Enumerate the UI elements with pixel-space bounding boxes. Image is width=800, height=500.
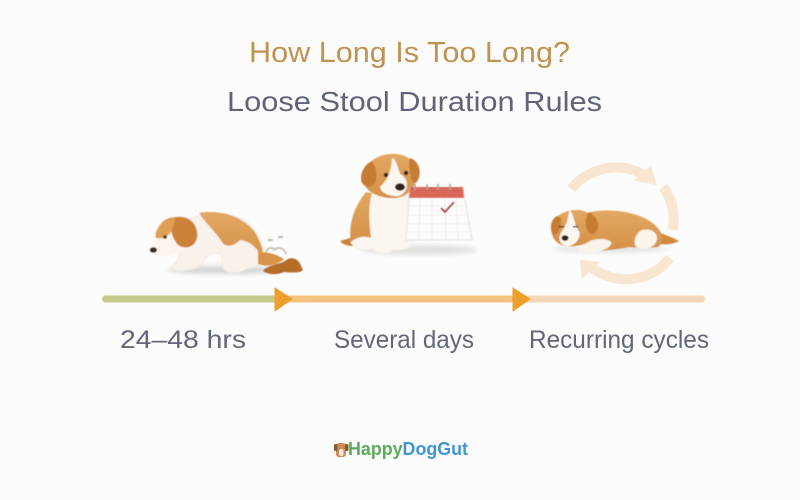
- stool pile: [263, 258, 303, 274]
- logo: [334, 439, 468, 459]
- dog face patch: [156, 217, 175, 238]
- top arc arrow: [571, 166, 657, 189]
- illustration: recurring cycle arrows: [571, 166, 674, 279]
- dog eyes and nose: [559, 226, 578, 241]
- segment: pale: [520, 296, 705, 302]
- label: 24–48 hrs: 24–48 hrs: [120, 326, 246, 354]
- arrow marker 2: [513, 288, 530, 311]
- calendar page: [406, 188, 472, 240]
- dog ears: [361, 158, 420, 187]
- dog back patch: [199, 212, 263, 259]
- shadow: [362, 245, 478, 255]
- logo wordmark: HappyDogGut: [348, 439, 468, 459]
- illustration: lying dog: [551, 210, 679, 252]
- label: recurring cycles: Recurring cycles: [529, 326, 709, 354]
- dog head: [152, 216, 197, 256]
- segment: green: [102, 296, 280, 302]
- dog eye and nose: [150, 235, 167, 253]
- dog back patch: [350, 192, 372, 242]
- calendar header: [409, 187, 464, 198]
- dog belly and legs: [576, 230, 657, 252]
- calendar check mark: [441, 202, 454, 212]
- dog muzzle: [380, 158, 407, 196]
- dog body white base: [172, 214, 264, 273]
- dog ears: [551, 212, 598, 235]
- dog ear: [171, 217, 197, 247]
- splash marks: [266, 248, 286, 254]
- calendar rings: [415, 184, 450, 190]
- dog eyes and nose: [384, 171, 408, 191]
- segment: orange: [280, 296, 520, 302]
- dog tail: [340, 236, 358, 246]
- dog tail: [258, 252, 284, 266]
- arrow marker 1: [275, 288, 292, 311]
- flies: [268, 237, 283, 240]
- dog muzzle: [560, 211, 580, 246]
- illustration: dog crouching with loose stool: [150, 212, 303, 274]
- dog tail: [655, 232, 679, 244]
- timeline: [102, 288, 705, 311]
- label: several days: Several days: [334, 326, 474, 354]
- title: How Long Is Too Long?: [249, 37, 570, 69]
- logo icon: dog: [334, 443, 348, 457]
- shadow: [552, 246, 668, 252]
- illustration: sitting dog with calendar: [340, 154, 478, 255]
- right arc: [663, 187, 674, 230]
- bottom arc arrow: [580, 258, 670, 279]
- calendar: [406, 184, 472, 240]
- dog body: [351, 188, 412, 254]
- dog head: [551, 210, 597, 246]
- calendar grid: [407, 198, 470, 240]
- dog body: [582, 211, 662, 251]
- subtitle: Loose Stool Duration Rules: [227, 86, 602, 117]
- dog head: [363, 154, 417, 198]
- shadow: [167, 266, 283, 274]
